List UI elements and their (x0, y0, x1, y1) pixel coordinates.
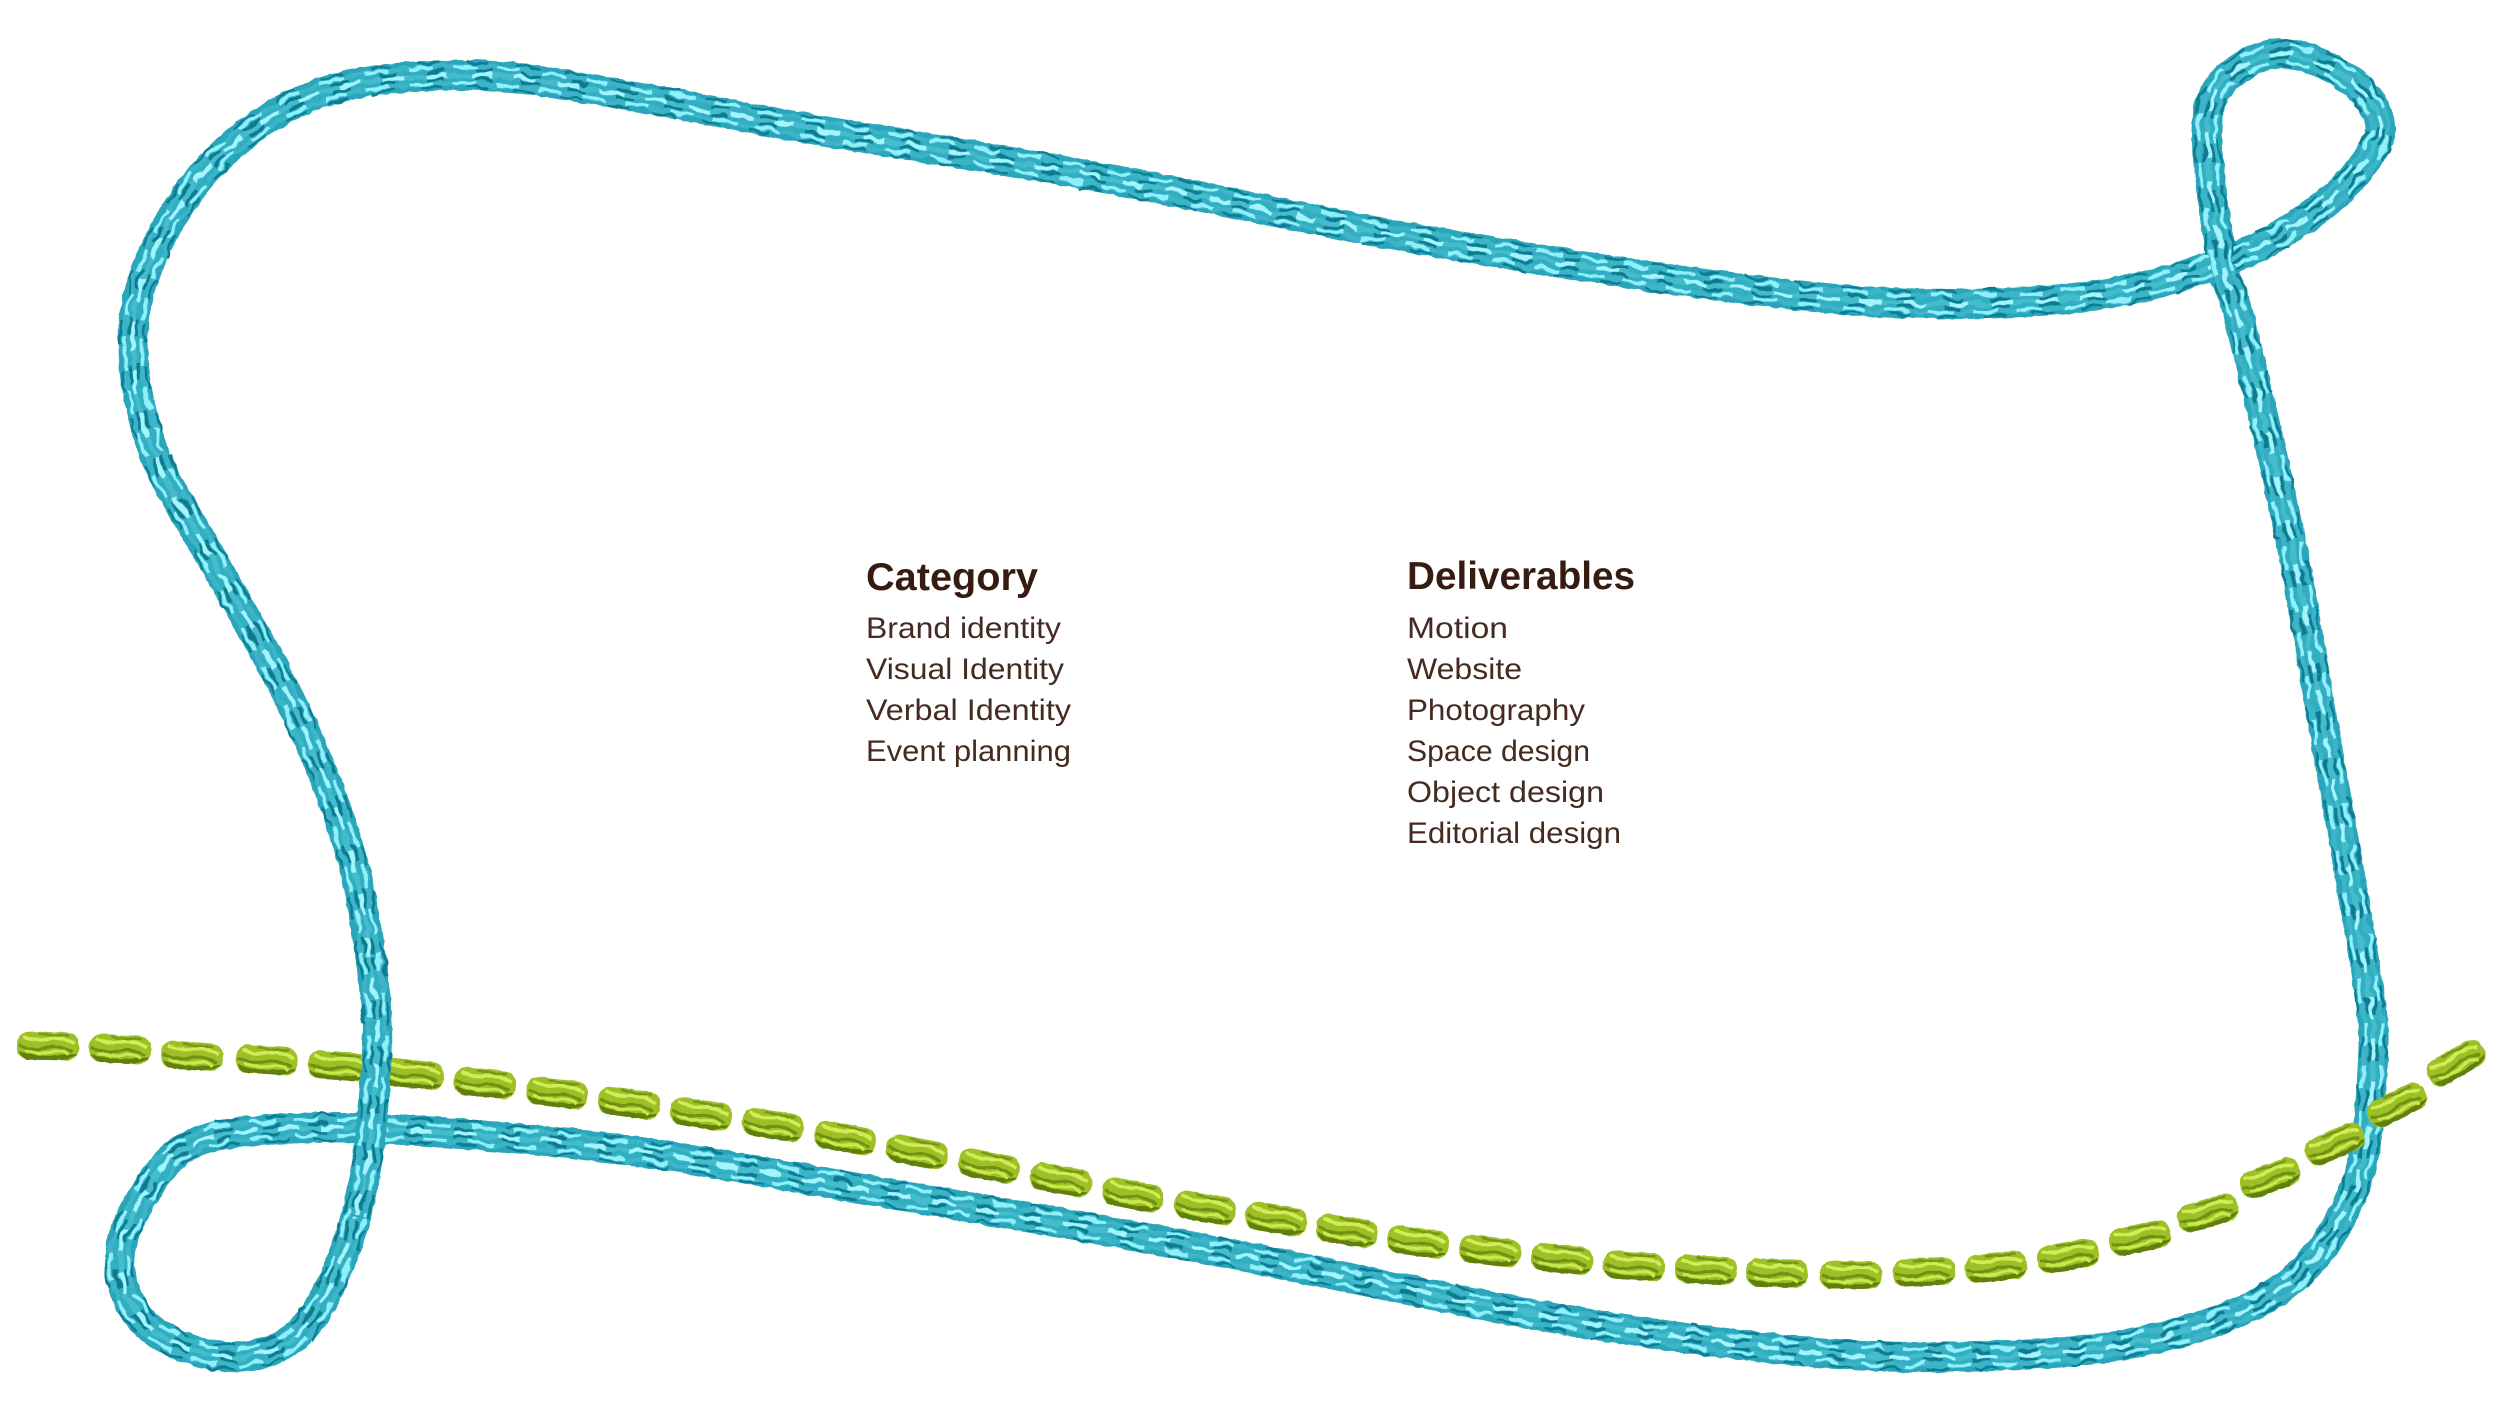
rope crossing over stitches, lower left (356, 960, 377, 1216)
item: event planning: Event planning (866, 735, 1071, 768)
green dashed stitch line (17, 1031, 2490, 1289)
item: website: Website (1407, 653, 1522, 686)
item: visual identity: Visual Identity (866, 653, 1064, 686)
item: verbal identity: Verbal Identity (866, 694, 1071, 727)
item: motion: Motion (1407, 612, 1508, 645)
heading: deliverables: Deliverables (1407, 555, 1635, 598)
item: brand identity: Brand identity (866, 612, 1061, 645)
heading: category: Category (866, 556, 1038, 599)
text block: category (866, 556, 1071, 768)
item: object design: Object design (1407, 776, 1604, 809)
item: photography: Photography (1407, 694, 1585, 727)
item: space design: Space design (1407, 735, 1590, 768)
text block: deliverables (1407, 555, 1635, 850)
item: editorial design: Editorial design (1407, 817, 1621, 850)
